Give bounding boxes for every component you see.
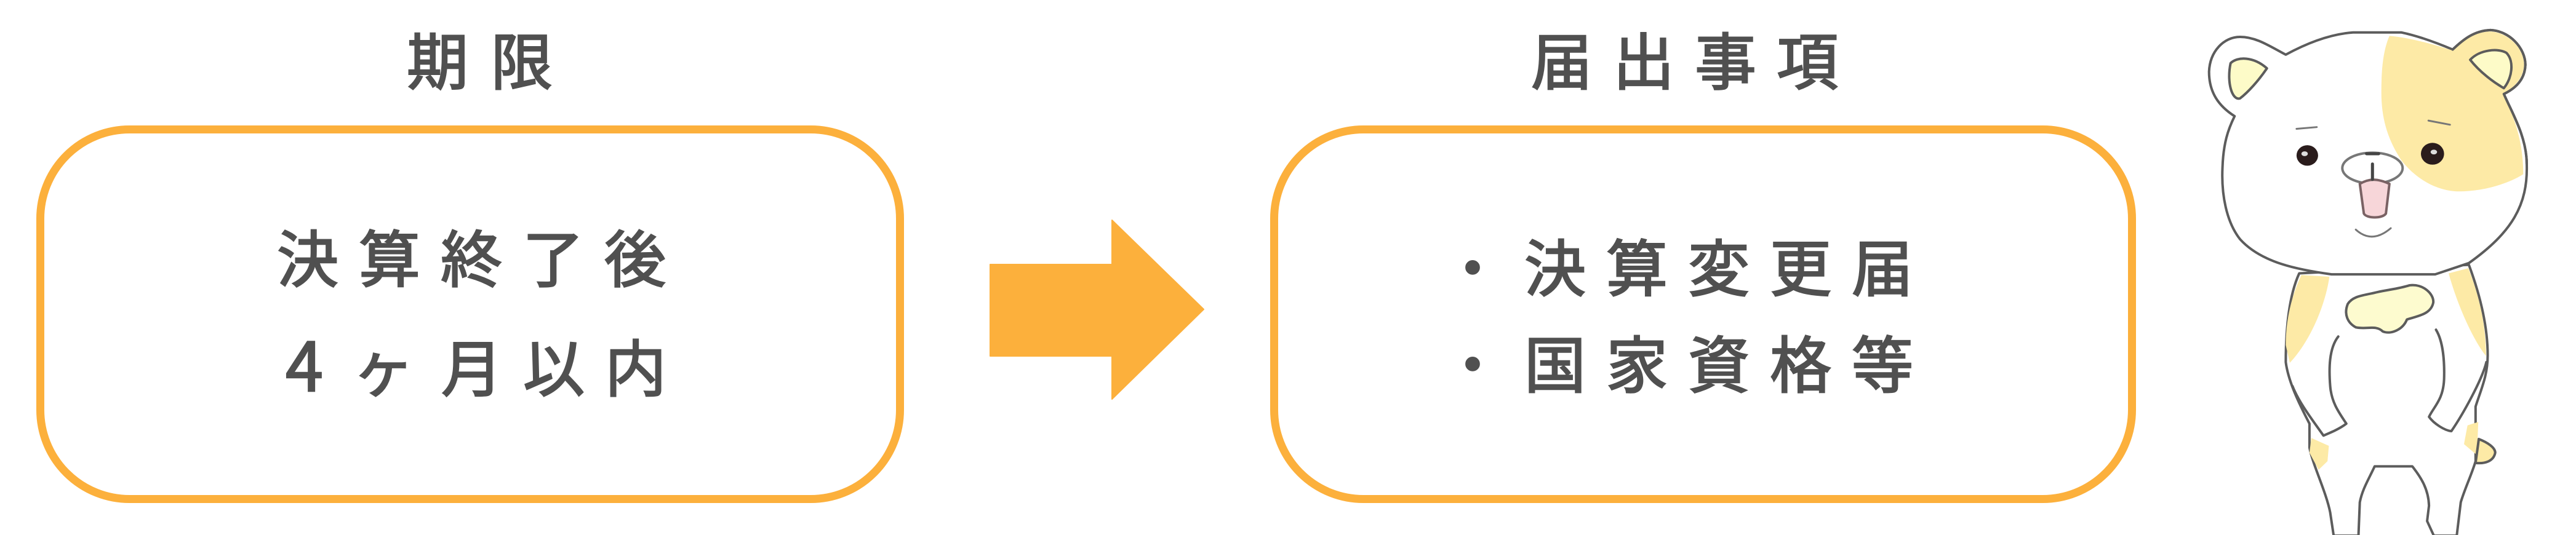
mouth [2356,228,2391,237]
icon: bear character [2209,30,2527,535]
body yellow patches [2286,268,2486,470]
tail [2476,439,2495,463]
deadline text: 決算終了後 [277,210,666,299]
nose line [2367,154,2378,180]
deadline text: ヶ月以内 [353,320,666,409]
deadline text [277,210,666,411]
notification box [1274,129,2132,499]
head yellow patch [2382,31,2524,191]
deadline box [41,129,900,499]
arrow [990,220,1204,399]
body [2286,265,2487,535]
ear inners [2229,58,2267,98]
arms [2292,330,2486,435]
tongue [2360,180,2390,218]
belly patch [2346,285,2433,333]
heading: deadline: 期限 [407,13,553,102]
heading: notification items: 届出事項 [1531,13,1838,102]
brows [2297,121,2450,129]
head [2209,30,2527,274]
notification list [1442,220,1913,405]
yellow side outline [2453,30,2527,164]
panel: deadline [41,13,900,499]
eyes [2297,143,2444,165]
muzzle [2342,153,2402,183]
panel: notification items [1274,13,2132,499]
deadline text: 4 [286,312,323,411]
notification list: ・国家資格等 [1442,316,1913,405]
notification list: ・決算変更届 [1442,220,1913,309]
